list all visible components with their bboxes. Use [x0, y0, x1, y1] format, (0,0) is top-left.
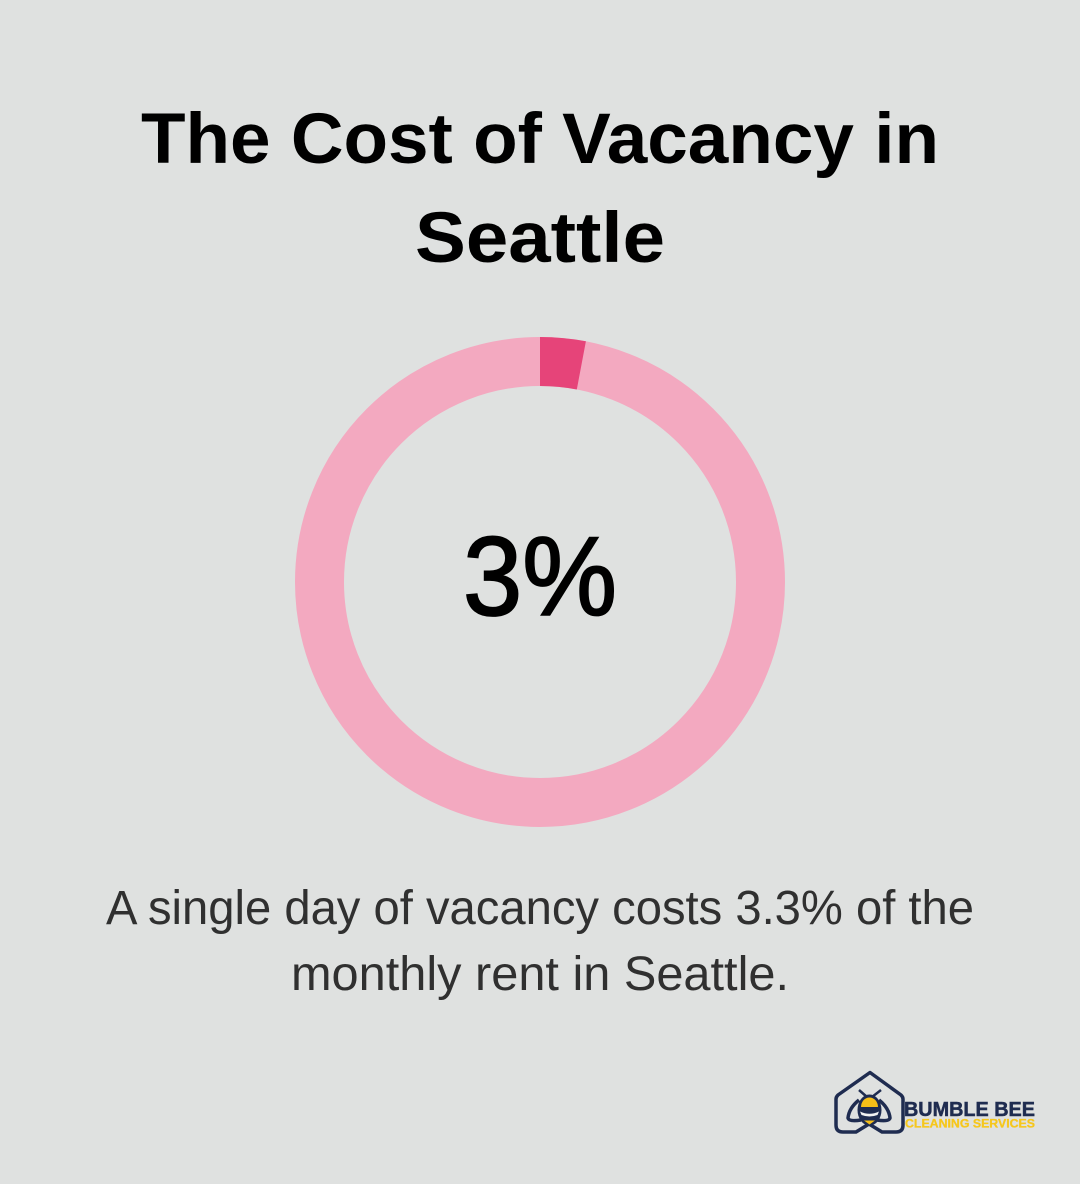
- title: The Cost of Vacancy in: [141, 100, 939, 179]
- logo wordmark: BUMBLE BEE: [904, 1099, 1035, 1121]
- icon: house with bee: [836, 1072, 903, 1132]
- donut highlighted segment: [540, 337, 586, 390]
- description text: [106, 882, 974, 1001]
- donut center value: 3%: [463, 514, 617, 639]
- description text: monthly rent in Seattle.: [291, 948, 789, 1001]
- title: Seattle: [415, 199, 665, 278]
- description text: A single day of vacancy costs 3.3% of the: [106, 882, 974, 935]
- donut chart: 3%: [320, 337, 760, 802]
- logo: Bumble Bee Cleaning Services: [836, 1072, 1035, 1132]
- title: [141, 100, 939, 278]
- donut track: [320, 362, 760, 802]
- logo tagline: CLEANING SERVICES: [905, 1116, 1035, 1130]
